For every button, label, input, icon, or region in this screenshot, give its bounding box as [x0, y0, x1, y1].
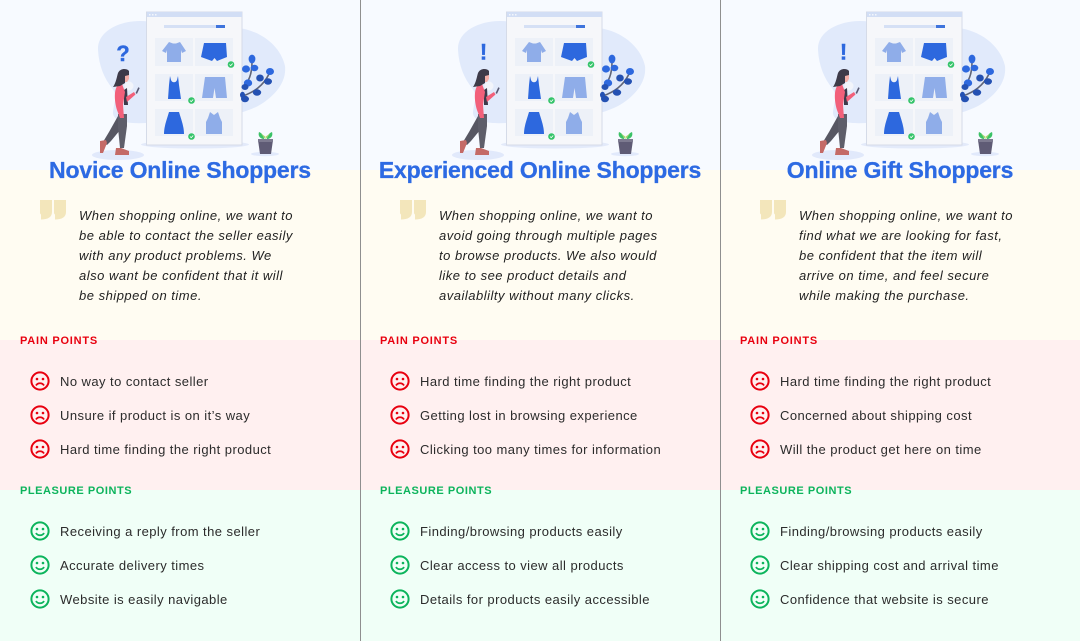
quote text: When shopping online, we want to	[799, 208, 1013, 223]
heading: pain points: PAIN POINTS	[20, 335, 98, 347]
pleasure point 2: Clear shipping cost and arrival time	[780, 558, 999, 573]
heading: Online Gift Shoppers	[787, 157, 1013, 183]
illustration: shopper browsing clothing with exclamation mark: !	[840, 40, 847, 64]
pleasure point 2	[30, 555, 204, 575]
pleasure point 3: Confidence that website is secure	[780, 592, 989, 607]
pain point 2	[30, 405, 250, 425]
heading: pain points: PAIN POINTS	[740, 335, 818, 347]
heading: Novice Online Shoppers	[49, 157, 311, 183]
quote text: like to see product details and	[439, 268, 626, 283]
quote text: avoid going through multiple pages	[439, 228, 658, 243]
icon: quotation mark	[760, 200, 786, 220]
illustration: shopper browsing clothing with exclamation mark	[812, 12, 1005, 160]
pain point 1: No way to contact seller	[60, 374, 209, 389]
pain point 2: Unsure if product is on it’s way	[60, 408, 250, 423]
quote text: with any product problems. We	[79, 248, 272, 263]
quote text: be shipped on time.	[79, 288, 202, 303]
quote text: also want be confident that it will	[79, 268, 283, 283]
icon: quotation mark	[40, 200, 66, 220]
pleasure point 3	[30, 589, 228, 609]
heading: Experienced Online Shoppers	[379, 157, 701, 183]
pleasure point 2: Accurate delivery times	[60, 558, 204, 573]
illustration: shopper browsing clothing with question mark	[92, 12, 285, 160]
icon: quotation mark	[400, 200, 426, 220]
pain point 3: Hard time finding the right product	[60, 442, 271, 457]
quote text: while making the purchase.	[799, 288, 970, 303]
panel: experienced online shoppers	[361, 12, 720, 641]
pain point 1	[750, 371, 991, 391]
pleasure point 1: Receiving a reply from the seller	[60, 524, 260, 539]
pain point 2	[390, 405, 638, 425]
quote text: to browse products. We also would	[439, 248, 657, 263]
pleasure point 3: Details for products easily accessible	[420, 592, 650, 607]
pleasure point 1	[390, 521, 623, 541]
quote text	[799, 208, 1013, 303]
panel: online gift shoppers	[721, 12, 1080, 641]
pleasure point 3	[750, 589, 989, 609]
quote text	[439, 208, 658, 303]
quote text: When shopping online, we want to	[79, 208, 293, 223]
quote text: arrive on time, and feel secure	[799, 268, 989, 283]
quote text	[79, 208, 293, 303]
pain point 1: Hard time finding the right product	[780, 374, 991, 389]
pleasure point 1: Finding/browsing products easily	[780, 524, 983, 539]
pain point 3	[30, 439, 271, 459]
pleasure point 2	[750, 555, 999, 575]
pain point 3: Will the product get here on time	[780, 442, 982, 457]
pain point 1	[30, 371, 209, 391]
heading: pleasure points: PLEASURE POINTS	[380, 485, 492, 497]
pain point 3	[390, 439, 661, 459]
quote text: availablilty without many clicks.	[439, 288, 635, 303]
pleasure point 1: Finding/browsing products easily	[420, 524, 623, 539]
pleasure point 2: Clear access to view all products	[420, 558, 624, 573]
pain point 1	[390, 371, 631, 391]
quote text: find what we are looking for fast,	[799, 228, 1002, 243]
pleasure point 3: Website is easily navigable	[60, 592, 228, 607]
illustration: shopper browsing clothing with exclamation mark	[452, 12, 645, 160]
quote text: be able to contact the seller easily	[79, 228, 293, 243]
pleasure point 2	[390, 555, 624, 575]
panel: novice online shoppers	[0, 12, 360, 641]
pain point 2	[750, 405, 972, 425]
pain point 1: Hard time finding the right product	[420, 374, 631, 389]
quote text: When shopping online, we want to	[439, 208, 653, 223]
pain point 3	[750, 439, 982, 459]
illustration: shopper browsing clothing with question mark: ?	[116, 41, 130, 66]
pain point 3: Clicking too many times for information	[420, 442, 661, 457]
pain point 2: Getting lost in browsing experience	[420, 408, 638, 423]
pleasure point 3	[390, 589, 650, 609]
pain point 2: Concerned about shipping cost	[780, 408, 972, 423]
pleasure point 1	[750, 521, 983, 541]
heading: pleasure points: PLEASURE POINTS	[740, 485, 852, 497]
illustration: shopper browsing clothing with exclamation mark: !	[480, 40, 487, 64]
pleasure point 1	[30, 521, 260, 541]
heading: pleasure points: PLEASURE POINTS	[20, 485, 132, 497]
heading: pain points: PAIN POINTS	[380, 335, 458, 347]
quote text: be confident that the item will	[799, 248, 982, 263]
